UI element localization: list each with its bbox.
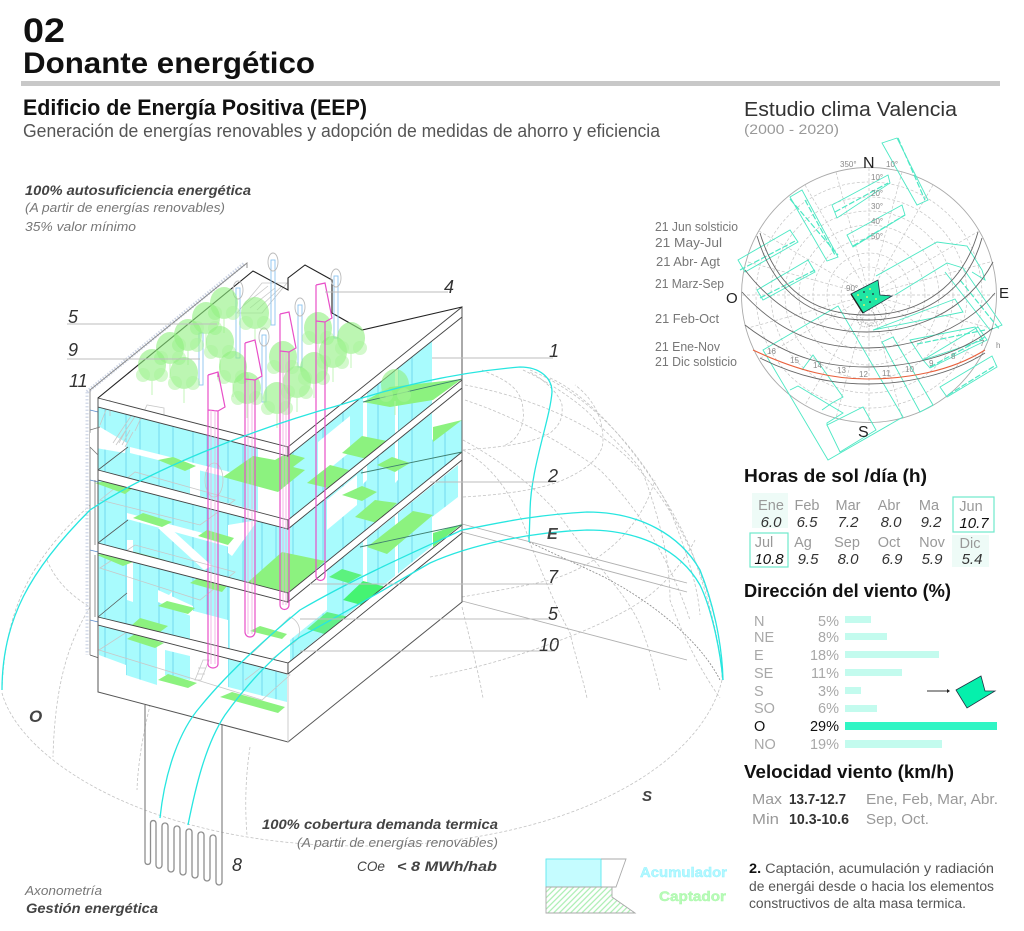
building faces — [98, 307, 462, 742]
panel: dirección del viento: NO — [754, 737, 776, 753]
legend: Captador — [659, 888, 727, 904]
panel: dirección del viento: SE — [754, 666, 774, 682]
degree and hour labels: 30° — [871, 202, 883, 211]
panel: dirección del viento: 3% — [818, 684, 839, 700]
building footprint flag — [851, 280, 892, 313]
callout lines and numbers: S — [642, 788, 652, 805]
building outline — [90, 265, 462, 742]
arrow — [927, 689, 950, 693]
callout lines and numbers: 10 — [539, 635, 559, 655]
chart: sun dome grid — [2, 370, 722, 846]
caption: axonometría — [24, 883, 158, 916]
callout lines and numbers: 1 — [549, 341, 559, 361]
callout lines and numbers: 4 — [444, 277, 454, 297]
degree and hour labels: 350° — [840, 160, 857, 169]
panel: horas de sol: 5.9 — [922, 551, 943, 568]
panel: velocidad viento: Ene, Feb, Mar, Abr. — [866, 792, 998, 808]
panel: horas de sol: Feb — [794, 498, 820, 514]
cardinal labels: E — [999, 285, 1009, 302]
structural slabs — [98, 307, 462, 674]
panel: velocidad viento: 13.7-12.7 — [789, 792, 846, 808]
panel: dirección del viento: 29% — [810, 719, 839, 735]
panel: horas de sol: Jun — [959, 499, 983, 515]
icon: building flag — [956, 676, 995, 708]
sun path date labels: 21 Feb-Oct — [655, 312, 720, 326]
wind bars — [845, 616, 997, 748]
text block: note 2: 2. Captación, acumulación y radiación — [749, 861, 994, 876]
heading: estudio clima — [744, 99, 958, 137]
cardinal labels: O — [726, 290, 738, 307]
sun path date labels — [655, 220, 738, 369]
cardinal labels: S — [858, 424, 869, 441]
pink solar chimneys — [208, 283, 332, 668]
callout lines and numbers: 5 — [68, 307, 79, 327]
panel: dirección del viento: Dirección del viento (%) — [744, 581, 951, 601]
panel: dirección del viento — [744, 581, 997, 753]
callout lines and numbers: 7 — [548, 567, 559, 587]
degree and hour labels: 50° — [871, 232, 883, 241]
collector swatch — [546, 887, 635, 913]
degree and hour labels: h — [996, 341, 1000, 350]
degree and hour labels: 10° — [871, 173, 883, 182]
text block: autosuficiencia: 35% valor mínimo — [25, 219, 136, 234]
degree and hour labels: 40° — [871, 217, 883, 226]
heading: estudio clima: (2000 - 2020) — [744, 121, 839, 137]
degree and hour labels: 10 — [905, 365, 914, 374]
panel: horas de sol: 8.0 — [838, 551, 859, 568]
panel: velocidad viento: Sep, Oct. — [866, 812, 929, 828]
callout lines and numbers: O — [29, 707, 42, 726]
panel: velocidad viento: Velocidad viento (km/h) — [744, 762, 954, 782]
title: Donante energético: Donante energético — [23, 47, 315, 80]
text block: autosuficiencia — [25, 182, 251, 234]
panel: horas de sol: Oct — [878, 535, 900, 551]
panel: dirección del viento: 8% — [818, 630, 839, 646]
callout lines and numbers: 8 — [232, 855, 242, 875]
panel: dirección del viento: N — [754, 614, 764, 630]
heading: Edificio de Energía Positiva: Edificio de Energía Positiva (EEP) — [23, 95, 367, 120]
panel: horas de sol: Abr — [878, 498, 900, 514]
degree and hour labels: 12 — [859, 370, 868, 379]
text block: cobertura: COe — [357, 858, 385, 874]
trees on green roof — [136, 287, 411, 428]
panel: horas de sol: Horas de sol /día (h) — [744, 466, 927, 486]
sun path date labels: 21 Marz-Sep — [655, 277, 724, 291]
polar grid — [742, 168, 996, 422]
callout lines and numbers — [29, 277, 652, 875]
panel: dirección del viento: 11% — [811, 666, 839, 682]
sun path date labels: 21 Abr- Agt — [656, 255, 721, 269]
caption: axonometría: Axonometría — [24, 883, 102, 898]
panel: horas de sol: 6.5 — [797, 514, 818, 531]
callout lines and numbers: 11 — [69, 371, 88, 391]
text block: autosuficiencia: 100% autosuficiencia energética — [25, 182, 251, 198]
cardinal labels — [726, 155, 1009, 441]
glass facade — [98, 342, 462, 702]
panel: horas de sol: 6.9 — [882, 551, 903, 568]
panel: horas de sol: 8.0 — [881, 514, 902, 531]
panel: dirección del viento: 19% — [810, 737, 839, 753]
green capture plates — [95, 379, 462, 713]
degree and hour labels: 10° — [886, 160, 898, 169]
sun path date labels: 21 Jun solsticio — [655, 220, 738, 234]
degree and hour labels: 8 — [951, 352, 956, 361]
panel: dirección del viento: 5% — [818, 614, 839, 630]
accumulator swatch — [546, 859, 601, 887]
panel: velocidad viento: 10.3-10.6 — [789, 812, 849, 828]
sun path date labels: 21 Dic solsticio — [655, 355, 737, 369]
callout lines and numbers: 2 — [547, 466, 558, 486]
panel: horas de sol: Ma — [919, 498, 940, 514]
chart: geothermal pipe — [145, 705, 222, 885]
panel: velocidad viento — [744, 762, 998, 828]
panel: velocidad viento: Max — [752, 792, 783, 808]
obstruction masks — [738, 138, 1002, 460]
panel: dirección del viento: O — [754, 719, 765, 735]
panel: dirección del viento: SO — [754, 701, 775, 717]
floor plate lines — [99, 283, 300, 700]
panel: dirección del viento: 6% — [818, 701, 839, 717]
solar noon line — [753, 350, 985, 379]
heading: estudio clima: Estudio clima Valencia — [744, 99, 958, 121]
panel: horas de sol: 9.5 — [798, 551, 819, 568]
sun path date labels: 21 Ene-Nov — [655, 340, 721, 354]
degree and hour labels: 16 — [767, 347, 776, 356]
callout lines and numbers: 5 — [548, 604, 559, 624]
panel: dirección del viento: 18% — [810, 648, 839, 664]
sun path date labels: 21 May-Jul — [655, 236, 722, 250]
degree and hour labels: 90° — [846, 284, 858, 293]
text block: cobertura: (A partir de energías renovables) — [297, 835, 498, 850]
degree and hour labels: 14 — [813, 361, 822, 370]
panel: dirección del viento: E — [754, 648, 764, 664]
interior voids — [90, 362, 398, 655]
panel: dirección del viento: S — [754, 684, 764, 700]
panel: horas de sol: 10.8 — [754, 551, 784, 568]
panel: dirección del viento: NE — [754, 630, 774, 646]
panel: horas de sol: 9.2 — [921, 514, 942, 531]
text block: cobertura: < 8 MWh/hab — [397, 858, 498, 874]
text block: autosuficiencia: (A partir de energías renovables) — [25, 200, 225, 215]
callout lines and numbers: 9 — [68, 340, 78, 360]
panel: horas de sol: Dic — [960, 536, 980, 552]
text block: cobertura: 100% cobertura demanda termica — [262, 816, 498, 832]
title: section number: 02 — [23, 12, 65, 50]
legend: Acumulador — [640, 864, 728, 880]
panel: horas de sol: Nov — [919, 535, 946, 551]
subheading: Generación de energías renovables y adopción de medidas de ahorro y eficiencia — [23, 121, 661, 141]
panel: velocidad viento: Min — [752, 812, 779, 828]
degree and hour labels: 13 — [837, 366, 846, 375]
text block: note 2 — [749, 861, 994, 911]
panel: horas de sol: Ene — [758, 498, 784, 514]
panel: horas de sol: 5.4 — [962, 551, 982, 568]
text block: note 2: constructivos de alta masa termica. — [749, 896, 966, 911]
panel: horas de sol: 7.2 — [838, 514, 859, 531]
outer wall with dotted hatch — [87, 263, 247, 658]
degree and hour labels: 7 — [980, 339, 985, 348]
cyan solar arcs — [2, 367, 723, 825]
panel: horas de sol: 6.0 — [761, 514, 782, 531]
degree and hour labels: 20° — [871, 189, 883, 198]
chart: solar diagram — [726, 138, 1009, 460]
panel: horas de sol: 10.7 — [959, 515, 989, 532]
degree and hour labels — [767, 160, 1000, 379]
caption: axonometría: Gestión energética — [26, 900, 158, 916]
callout lines and numbers: E — [547, 526, 559, 543]
panel: horas de sol: Sep — [834, 535, 860, 551]
text block: note 2: de energái desde o hacia los elementos — [749, 879, 994, 894]
legend — [546, 859, 728, 913]
building axonometric — [87, 253, 470, 742]
degree and hour labels: 15 — [790, 356, 799, 365]
roof — [98, 265, 462, 447]
blue ventilation pipes — [199, 253, 341, 402]
sun paths — [742, 232, 995, 384]
text block: cobertura — [262, 816, 498, 874]
panel: horas de sol — [744, 466, 994, 568]
panel: horas de sol: Ag — [794, 535, 812, 551]
panel: horas de sol: Jul — [755, 535, 773, 551]
cardinal labels: N — [863, 155, 875, 172]
degree and hour labels: 9 — [929, 359, 934, 368]
heading rule — [21, 81, 1000, 86]
degree and hour labels: 11 — [882, 369, 891, 378]
panel: horas de sol: Mar — [836, 498, 861, 514]
